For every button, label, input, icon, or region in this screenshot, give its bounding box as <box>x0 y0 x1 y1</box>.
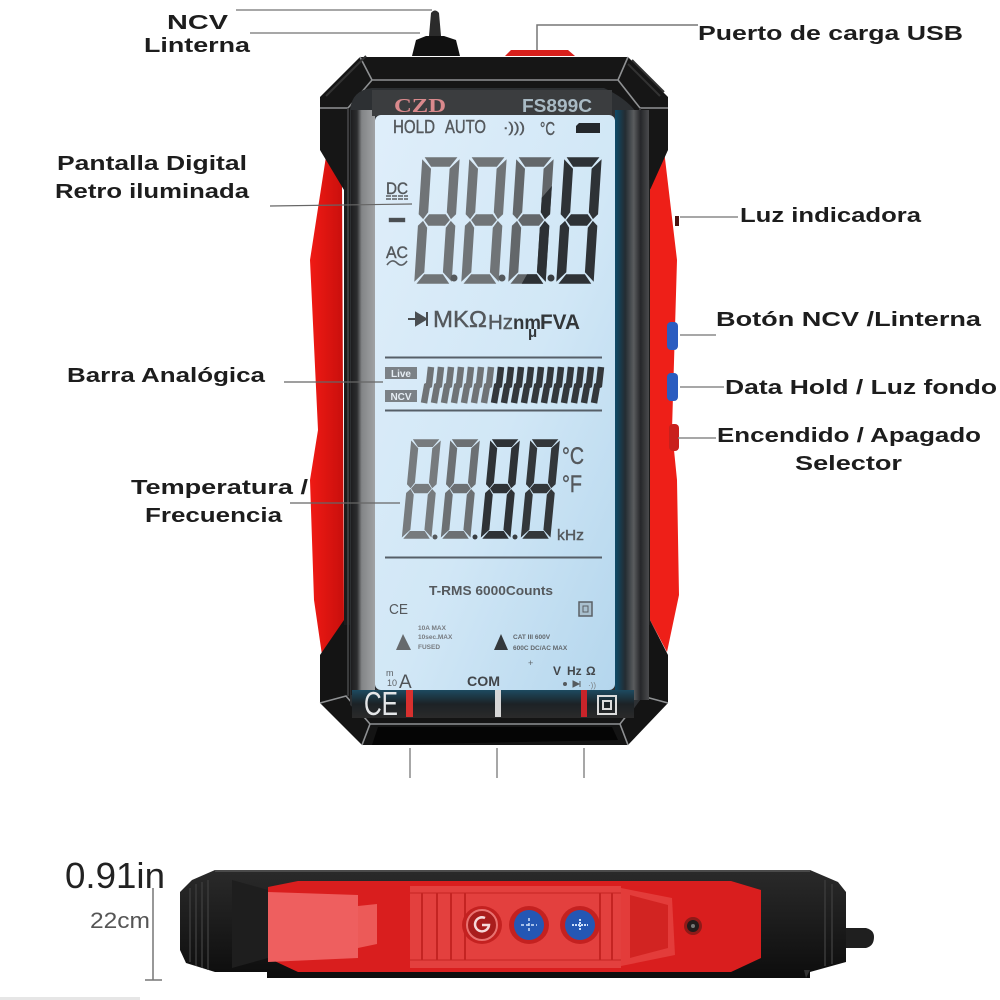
probe stub <box>846 928 874 948</box>
label: Pantalla Digital: Pantalla Digital <box>57 153 247 175</box>
warning text left: 10sec.MAX <box>418 634 453 641</box>
terminal labels: V <box>553 664 561 678</box>
units row: MKΩ <box>433 306 487 332</box>
brand CZD: CZD <box>394 95 446 117</box>
warning text left: 10A MAX <box>418 625 447 632</box>
multimeter side view <box>180 870 874 978</box>
status row <box>393 117 600 139</box>
status row: °C <box>540 119 555 139</box>
terminal labels: Hz <box>567 664 582 678</box>
terminal labels <box>386 664 596 693</box>
CE mark and certification icon <box>389 601 592 618</box>
label: Encendido / Apagado: Encendido / Apagado <box>717 425 981 447</box>
terminal labels: A <box>399 672 412 693</box>
analog bar section: Live <box>391 369 411 380</box>
units row: FVA <box>540 311 580 334</box>
black body <box>180 870 846 978</box>
blue button one <box>509 906 549 944</box>
temperature and frequency units: °F <box>562 471 582 498</box>
warning text right: + <box>528 658 533 668</box>
label: Frecuencia: Frecuencia <box>145 505 283 527</box>
indicator light <box>675 216 679 226</box>
label: Linterna: Linterna <box>144 35 251 57</box>
power button <box>462 906 502 944</box>
dimension 0.91in: 0.91in <box>65 855 165 896</box>
terminal labels: m <box>386 668 394 678</box>
thickness dimension <box>65 855 165 980</box>
label: Data Hold / Luz fondo: Data Hold / Luz fondo <box>725 377 997 399</box>
label: Selector: Selector <box>795 453 902 475</box>
lower strip with terminal marks: CE <box>364 685 398 722</box>
units row <box>408 306 580 341</box>
model FS899C: FS899C <box>522 96 592 116</box>
terminal labels: Ω <box>586 664 596 678</box>
dimension line <box>145 888 162 980</box>
red power button <box>669 424 679 451</box>
analog bar section: NCV <box>390 392 412 403</box>
main display digits <box>415 158 601 283</box>
USB charging port cap <box>505 50 575 56</box>
terminal labels: 10 <box>387 678 397 688</box>
NCV probe tip <box>412 10 460 56</box>
label: Luz indicadora: Luz indicadora <box>740 205 922 227</box>
blue data hold button <box>667 373 678 401</box>
leader lines to labels <box>236 10 738 503</box>
LCD screen <box>375 115 615 690</box>
dimension 22cm: 22cm <box>90 908 150 933</box>
label: Botón NCV / Linterna: Botón NCV /Linterna <box>716 309 982 331</box>
units row: μ <box>528 324 537 341</box>
DC and AC indicators <box>386 179 408 265</box>
T-RMS caption: T-RMS 6000Counts <box>429 583 553 598</box>
warning text left: FUSED <box>418 644 440 651</box>
analog bar section <box>385 358 602 558</box>
bottom left smudge <box>0 997 140 1000</box>
temperature and frequency units: kHz <box>557 527 584 544</box>
DC and AC indicators: DC <box>386 179 408 198</box>
warning text left <box>396 625 453 651</box>
temperature and frequency units <box>557 443 584 544</box>
red side panel <box>268 881 761 972</box>
label: Puerto de carga USB: Puerto de carga USB <box>698 23 963 45</box>
label: Barra Analógica: Barra Analógica <box>67 365 266 387</box>
warning text right: 600C DC/AC MAX <box>513 645 568 652</box>
screen bezel <box>350 88 649 717</box>
terminal labels: ·)) <box>588 681 596 690</box>
lower strip with terminal marks <box>352 685 634 722</box>
black housing <box>320 56 668 745</box>
label: Temperatura: Temperatura / <box>131 477 309 499</box>
terminal labels: COM <box>467 673 500 689</box>
terminal leader lines <box>410 748 584 778</box>
blue button two <box>560 906 600 944</box>
units row: nm <box>513 313 541 334</box>
DC and AC indicators: AC <box>386 243 408 262</box>
temperature and frequency units: °C <box>562 443 584 470</box>
units row: Hz <box>488 312 513 334</box>
warning text right <box>494 634 568 668</box>
label: NCV: NCV <box>167 12 229 34</box>
status row: AUTO <box>445 117 486 137</box>
label: Retro iluminada: Retro iluminada <box>55 181 250 203</box>
status row: ·))) <box>503 119 525 135</box>
left red grip <box>310 150 344 655</box>
blue NCV button <box>667 322 678 350</box>
CE mark and certification icon: CE <box>389 601 408 618</box>
status row: HOLD <box>393 117 435 137</box>
indicator jack <box>684 917 702 935</box>
multimeter front view <box>310 10 679 745</box>
right red grip <box>650 150 679 652</box>
warning text right: CAT III 600V <box>513 634 551 641</box>
secondary display digits <box>403 440 559 540</box>
